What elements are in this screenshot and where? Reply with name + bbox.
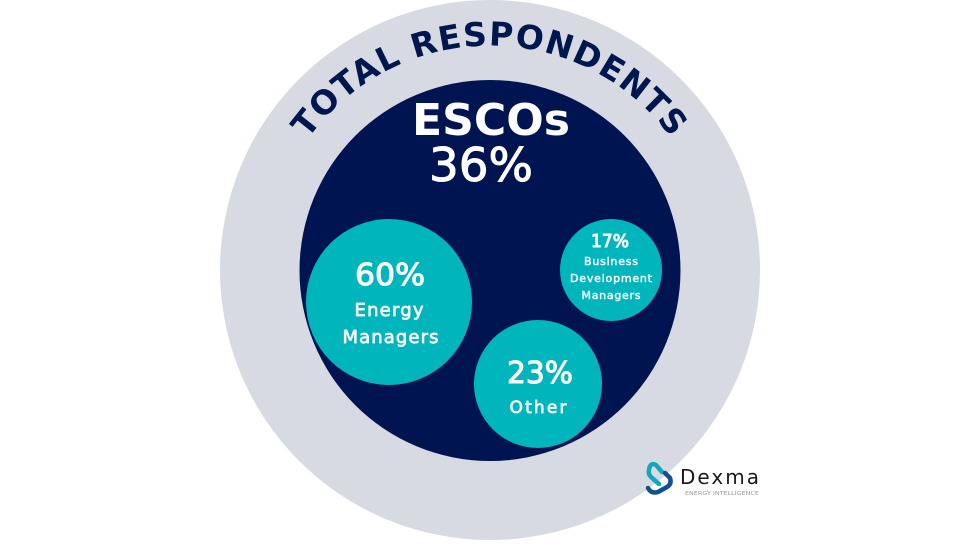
bubble: business development managers 17%: Development [570, 272, 653, 285]
inner circle: ESCOs [300, 80, 680, 461]
bubble: energy managers 60%: Energy [354, 300, 424, 321]
outer circle: total respondents [220, 0, 760, 540]
bubble: energy managers 60%: 60% [355, 258, 425, 293]
tagline: ENERGY INTELLIGENCE [685, 491, 760, 497]
bubble: energy managers 60%: Managers [342, 327, 438, 348]
icon: Dexma S mark [648, 464, 671, 492]
bubble: other 23% [474, 320, 602, 448]
logo: Dexma [648, 464, 760, 497]
figure: 36%: 36% [429, 138, 533, 192]
bubble: energy managers 60% [306, 219, 472, 385]
curved title: total respondents: TOTAL RESPONDENTS [289, 21, 687, 133]
bubble: other 23%: 23% [507, 356, 573, 391]
heading: ESCOs: ESCOs [412, 95, 570, 146]
wordmark: Dexma [680, 465, 759, 489]
bubble: business development managers 17%: 17% [591, 231, 629, 252]
bubble: other 23%: Other [510, 398, 566, 418]
bubble: business development managers 17%: Business [584, 255, 638, 268]
bubble: business development managers 17% [560, 219, 662, 321]
bubble: business development managers 17%: Managers [582, 289, 641, 302]
